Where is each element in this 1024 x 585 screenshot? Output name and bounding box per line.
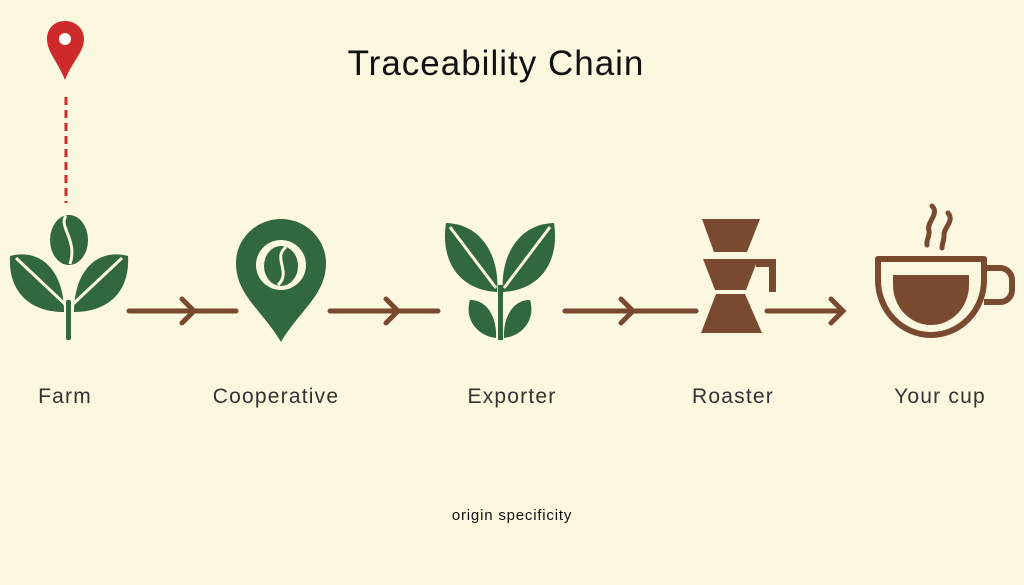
label: Cooperative: Cooperative (213, 385, 339, 408)
icon: red location pin (47, 21, 84, 80)
icon: coffee cup (878, 206, 1012, 335)
title: Traceability Chain (348, 44, 644, 83)
icon: cooperative pin with bean (236, 219, 326, 342)
icon: farm plant with bean (10, 215, 128, 340)
caption: origin specificity (452, 507, 572, 524)
label: Farm: Farm (38, 385, 92, 408)
arrow 4 (767, 299, 843, 323)
icon: roaster chemex (701, 219, 776, 333)
arrow 2 (330, 299, 438, 323)
label: Your cup: Your cup (894, 385, 986, 408)
label: Exporter: Exporter (468, 385, 556, 408)
icon: exporter seedling (445, 223, 555, 340)
label: Roaster: Roaster (692, 385, 774, 408)
dashed connector (64, 97, 68, 203)
arrow 3 (565, 299, 696, 323)
arrow 1 (129, 299, 236, 323)
